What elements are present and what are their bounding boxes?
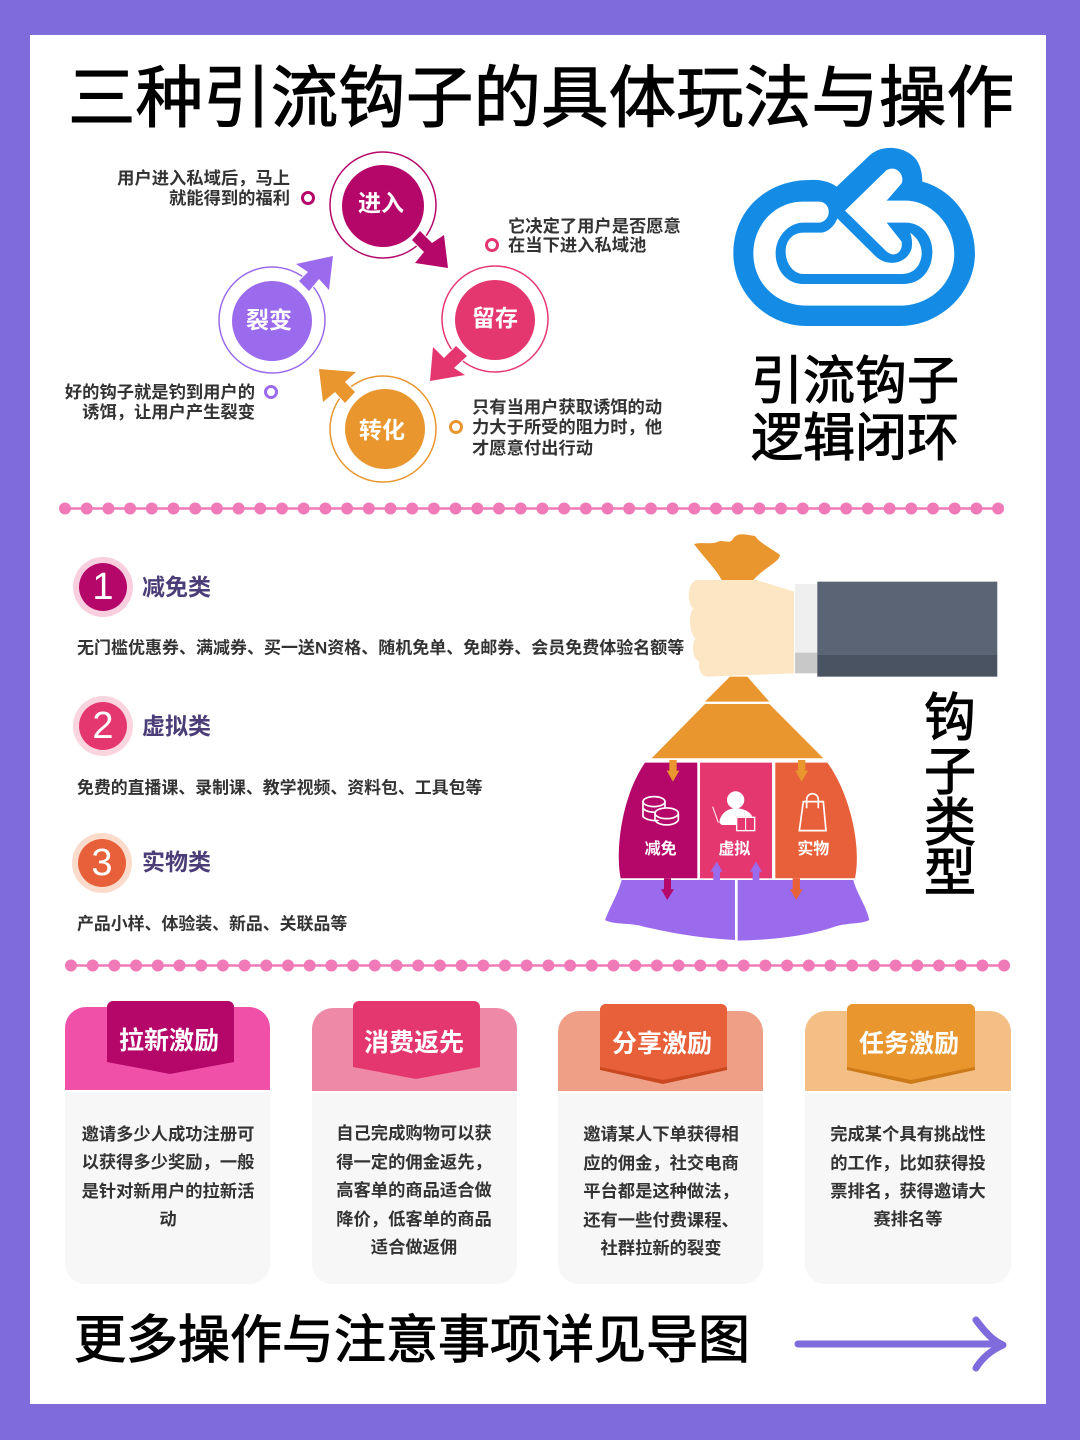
card text: 自己完成购物可以获: [336, 1123, 492, 1143]
arrow: footer: [798, 1320, 1003, 1368]
card text: 高客单的商品适合做: [336, 1180, 492, 1200]
card text: 应的佣金，社交电商: [583, 1153, 739, 1173]
heading: 引流钩子逻辑闭环: 引流钩子: [751, 353, 959, 411]
heading: 钩子类型 (vertical): 子: [924, 744, 976, 802]
card text: 以获得多少奖励，一般: [82, 1152, 254, 1172]
hook type 2: 虚拟类: [73, 696, 482, 798]
footer text: 更多操作与注意事项详见导图: [74, 1312, 750, 1370]
card: 消费返先: [312, 1001, 517, 1284]
bag shoulder: [652, 704, 823, 758]
icon: coins: [643, 797, 678, 825]
step: 进入: 进入: [358, 190, 404, 216]
note: 裂变: 好的钩子就是钓到用户的: [65, 382, 255, 402]
ribbon: [353, 1001, 480, 1079]
hook type 1: 减免类: 无门槛优惠券、满减券、买一送N资格、随机免单、免邮券、会员免费体验名额等: [77, 638, 684, 658]
fist: [689, 580, 794, 677]
hook type 2: 虚拟类: 2: [92, 705, 114, 747]
step: 留存: [442, 266, 548, 372]
heading: 钩子类型 (vertical): 类: [924, 795, 976, 853]
bag neck: [705, 677, 769, 702]
card: 分享激励: 分享激励: [612, 1030, 712, 1058]
icon: teacher with book: [713, 791, 755, 831]
card text: 平台都是这种做法，: [583, 1181, 739, 1201]
icon: shopping bag: [799, 794, 826, 831]
note: 裂变: [65, 382, 276, 422]
bag panel: 实物: [775, 763, 857, 878]
card text: 完成某个具有挑战性: [830, 1124, 986, 1144]
card text: 是针对新用户的拉新活: [82, 1181, 254, 1201]
card text: 邀请某人下单获得相: [583, 1124, 739, 1144]
hook type 1: 减免类: 减免类: [142, 574, 211, 600]
card text: 适合做返佣: [371, 1237, 457, 1257]
note: 转化: 才愿意付出行动: [472, 438, 593, 458]
note: 转化: 只有当用户获取诱饵的动: [472, 397, 662, 417]
cycle diagram: [65, 152, 681, 482]
step: 转化: 转化: [359, 417, 405, 443]
bag panel: 减免: [619, 763, 697, 878]
ribbon: [847, 1004, 975, 1084]
note: 裂变: 诱饵，让用户产生裂变: [82, 402, 255, 422]
note: 转化: [450, 397, 662, 458]
icon: blue cloud loop: [733, 148, 975, 326]
hook type 3: 实物类: 3: [91, 842, 113, 884]
illustration: hand holding bag: [605, 534, 997, 941]
note: 留存: 它决定了用户是否愿意: [508, 216, 681, 236]
card text: [830, 1124, 986, 1229]
step: 转化: [330, 376, 436, 482]
bag base: [605, 880, 869, 941]
small arrows: [661, 760, 808, 900]
card text: 的工作，比如获得投: [830, 1153, 986, 1173]
ribbon: [107, 1001, 234, 1074]
note: 留存: 在当下进入私域池: [508, 235, 646, 255]
hook type 1: 减免类: [73, 557, 684, 658]
hook type 3: 实物类: [72, 833, 347, 934]
title: 三种引流钩子的具体玩法与操作: [68, 62, 1014, 136]
card: 消费返先: 消费返先: [364, 1029, 464, 1057]
card text: [336, 1123, 492, 1257]
card text: 票排名，获得邀请大: [830, 1181, 986, 1201]
card text: 赛排名等: [873, 1209, 943, 1229]
hook type 1: 减免类: 1: [92, 566, 114, 608]
arrow: 裂变 to 进入: [296, 256, 333, 291]
card: 分享激励: [558, 1004, 763, 1284]
bag panel: 实物: 实物: [797, 839, 829, 858]
step: 进入: [330, 152, 436, 258]
arrow: 留存 to 转化: [430, 346, 467, 381]
step: 裂变: [219, 267, 325, 373]
card text: [583, 1124, 739, 1258]
card text: 动: [159, 1209, 177, 1229]
note: 留存: [486, 216, 681, 255]
card: 任务激励: [805, 1004, 1011, 1284]
arrow: 进入 to 留存: [412, 231, 448, 268]
sleeve: [795, 582, 997, 677]
hook type 3: 实物类: 实物类: [142, 849, 211, 875]
card text: 降价，低客单的商品: [336, 1209, 492, 1229]
note: 转化: 力大于所受的阻力时，他: [472, 417, 662, 437]
heading: 钩子类型 (vertical): 型: [924, 845, 976, 903]
card text: 社群拉新的裂变: [601, 1238, 721, 1258]
card text: 邀请多少人成功注册可: [82, 1124, 254, 1144]
card text: [82, 1124, 254, 1229]
bag panel: 减免: 减免: [645, 839, 677, 858]
note: 进入: 就能得到的福利: [169, 188, 290, 208]
step: 留存: 留存: [472, 305, 518, 331]
heading: 引流钩子逻辑闭环: [751, 353, 959, 468]
note: 进入: [117, 168, 314, 208]
heading: 钩子类型 (vertical): 钩: [924, 690, 976, 748]
heading: 引流钩子逻辑闭环: 逻辑闭环: [751, 410, 959, 468]
heading: 钩子类型 (vertical): [924, 690, 976, 903]
step: 裂变: 裂变: [246, 307, 292, 333]
hook type 3: 实物类: 产品小样、体验装、新品、关联品等: [77, 914, 347, 934]
arrow: 转化 to 裂变: [319, 369, 356, 403]
bag knot tuft: [694, 534, 780, 580]
card text: 还有一些付费课程、: [583, 1210, 739, 1230]
bag panel: 虚拟: 虚拟: [718, 839, 750, 858]
note: 进入: 用户进入私域后，马上: [117, 168, 290, 188]
card: 任务激励: 任务激励: [859, 1030, 959, 1058]
card: 拉新激励: 拉新激励: [119, 1026, 219, 1055]
bag panel: 虚拟: [700, 763, 772, 878]
card: 拉新激励: [65, 1001, 270, 1284]
ribbon: [600, 1004, 727, 1084]
card text: 得一定的佣金返先，: [336, 1152, 492, 1172]
hook type 2: 虚拟类: 虚拟类: [142, 713, 211, 739]
hook type 2: 虚拟类: 免费的直播课、录制课、教学视频、资料包、工具包等: [77, 778, 482, 798]
